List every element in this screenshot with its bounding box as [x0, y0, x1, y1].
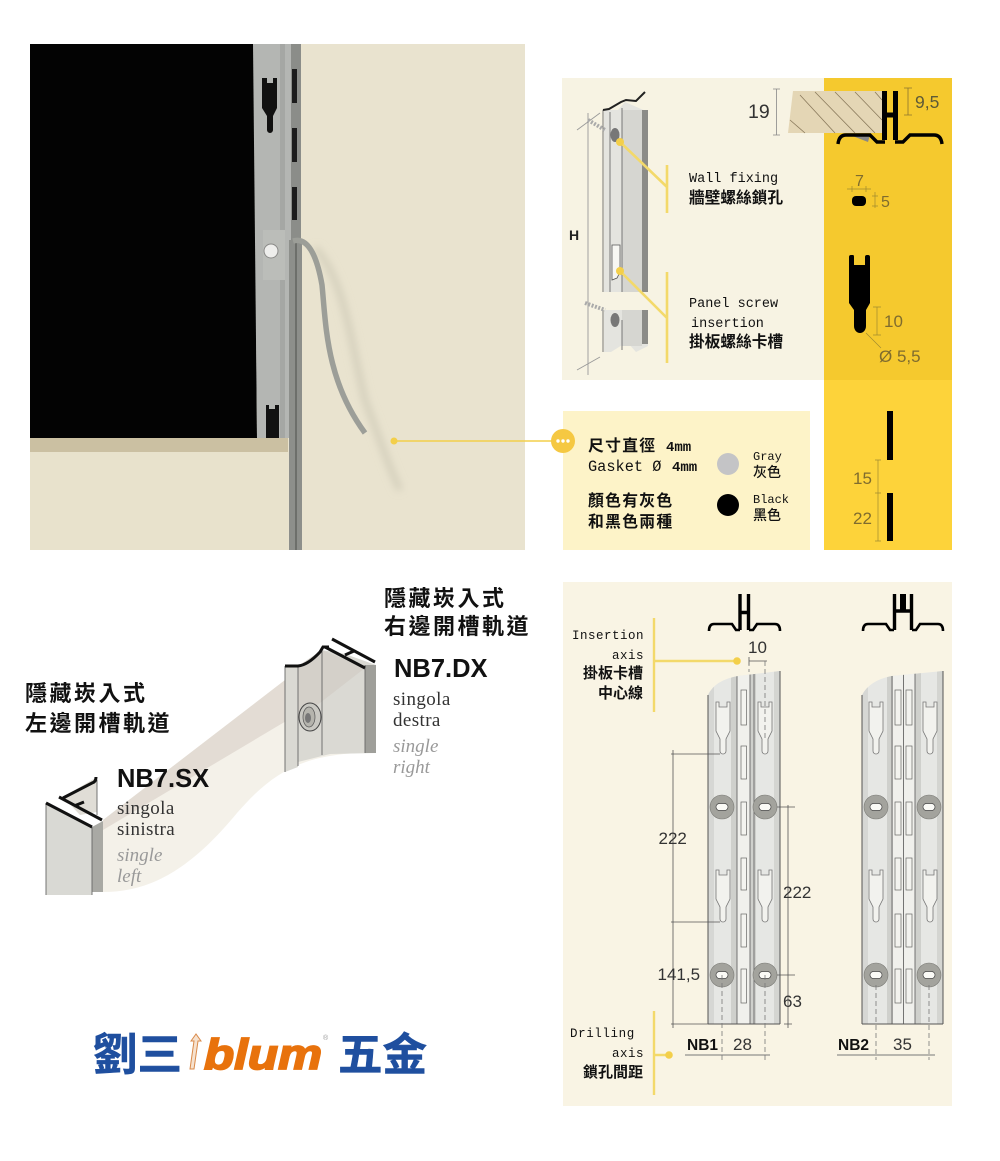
dimension 19: 19 [748, 101, 770, 123]
swath connecting the two rail pieces [103, 670, 375, 892]
slots 15 / 22: 22 [853, 509, 872, 528]
text: colour availability: 顏色有灰色 [588, 491, 674, 510]
icon: rail isometric [585, 92, 648, 352]
keyhole slot 10 / 5,5: 10 [884, 312, 903, 331]
swatch: gray: 灰色 [753, 464, 781, 480]
heading: left rail: 隱藏崁入式 [25, 681, 148, 706]
text: gasket size: 4mm [672, 460, 697, 476]
dimension H [569, 113, 600, 375]
text: colour availability [588, 491, 674, 531]
slots 15 / 22 [853, 411, 893, 541]
dimensions NB1: NB1 [687, 1037, 718, 1054]
label: NB7.DX: destra [393, 710, 441, 731]
label: NB7.SX: single [117, 845, 162, 866]
profile NB2 [863, 594, 943, 631]
logo: Liu San Blum hardware: ® [323, 1034, 329, 1042]
dimensions NB1: 10 [748, 638, 767, 657]
slots 15 / 22: 15 [853, 469, 872, 488]
hole 7 x 5: 7 [855, 173, 864, 190]
label: insertion axis: axis [612, 649, 644, 663]
label: panel screw insertion [689, 297, 783, 351]
label: NB7.DX: single [393, 736, 438, 757]
black cabinet panel [30, 44, 257, 438]
keyhole slot 10 / 5,5: Ø 5,5 [879, 347, 921, 366]
label: insertion axis [572, 618, 741, 712]
heading: right rail: 隱藏崁入式 [384, 586, 507, 611]
dimension 9,5: 9,5 [915, 92, 939, 112]
label: NB7.SX: left [117, 866, 142, 887]
dimensions NB2: 35 [893, 1035, 912, 1054]
dimensions NB2: NB2 [838, 1037, 869, 1054]
text: colour availability: 和黑色兩種 [588, 512, 674, 531]
label: NB7.SX: singola [117, 798, 175, 819]
swatch: black: 黑色 [753, 507, 781, 523]
icon: rail piece right [285, 639, 376, 772]
text: gasket size [588, 436, 697, 476]
gasket cable [293, 240, 400, 490]
label: NB7.DX: NB7.DX [394, 655, 488, 683]
label: NB7.DX: singola [393, 689, 451, 710]
panel: rail isometric with labels [562, 78, 824, 380]
text: gasket size: 尺寸直徑 [588, 436, 656, 455]
label: wall fixing: Wall fixing [689, 172, 778, 187]
callout line: gasket [390, 438, 555, 444]
panel: drilling diagram [563, 582, 952, 1106]
dimensions NB1: 141,5 [658, 965, 700, 984]
icon: rail piece left [46, 777, 103, 895]
dimension 9,5 [904, 88, 939, 115]
wood section with profile [788, 91, 942, 144]
swatch: black: Black [753, 493, 789, 507]
label: NB7.SX: NB7.SX [117, 765, 209, 793]
label: drilling axis: Drilling [570, 1027, 635, 1041]
hole 7 x 5 [847, 173, 890, 211]
swatch: gray: Gray [753, 450, 782, 464]
label: NB7.SX [117, 765, 209, 887]
heading: left rail [25, 681, 172, 736]
label: panel screw insertion: 掛板螺絲卡槽 [689, 332, 783, 351]
label: drilling axis: 鎖孔間距 [583, 1063, 643, 1081]
logo: Liu San Blum hardware [93, 1031, 427, 1080]
label: panel screw insertion: Panel screw [689, 297, 778, 312]
dimensions NB2 [837, 985, 935, 1060]
label: insertion axis: Insertion [572, 629, 644, 643]
label: drilling axis [570, 1011, 673, 1095]
callout lines: wall fixing and panel screw [616, 138, 667, 363]
label: panel screw insertion: insertion [691, 317, 764, 332]
photo: concealed rail with gasket [30, 44, 525, 550]
swatch: black [717, 493, 789, 523]
label: NB7.DX: right [393, 757, 431, 778]
dimensions NB1: 63 [783, 992, 802, 1011]
logo: Liu San Blum hardware: blum [204, 1031, 322, 1079]
icon: yellow dots marker [551, 429, 575, 453]
profile NB1 [709, 594, 780, 631]
label: NB7.DX [393, 655, 488, 778]
rail NB2 [862, 665, 943, 1025]
dimension H: H [569, 227, 579, 243]
dimensions NB1: 222 [658, 829, 687, 848]
text: gasket size: 4mm [666, 440, 691, 456]
label: drilling axis: axis [612, 1047, 644, 1061]
dimensions NB1: 28 [733, 1035, 752, 1054]
logo: Liu San Blum hardware: 五金 [338, 1031, 427, 1080]
heading: left rail: 左邊開槽軌道 [25, 711, 172, 736]
hole 7 x 5: 5 [881, 194, 890, 211]
label: wall fixing: 牆壁螺絲鎖孔 [689, 188, 783, 207]
dimensions NB1 [658, 638, 811, 1060]
swatch: gray [717, 450, 782, 480]
panel: yellow dimensions column [748, 78, 952, 550]
icon: blum arrow [190, 1034, 201, 1069]
heading: right rail: 右邊開槽軌道 [384, 614, 531, 639]
dimensions NB1: 222 [783, 883, 811, 902]
panel: gasket colours [551, 411, 810, 550]
logo: Liu San Blum hardware: 劉三 [93, 1031, 182, 1080]
rail NB1 [708, 665, 780, 1025]
label: insertion axis: 掛板卡槽 [583, 664, 643, 682]
heading: right rail [384, 586, 531, 639]
label: insertion axis: 中心線 [598, 684, 643, 702]
metal rail [253, 44, 301, 438]
keyhole slot 10 / 5,5 [849, 255, 921, 366]
label: NB7.SX: sinistra [117, 819, 175, 840]
label: wall fixing [689, 172, 783, 207]
plank and lower panel [30, 240, 302, 550]
text: gasket size: Gasket Ø [588, 458, 661, 476]
dimension 19 [748, 89, 780, 135]
